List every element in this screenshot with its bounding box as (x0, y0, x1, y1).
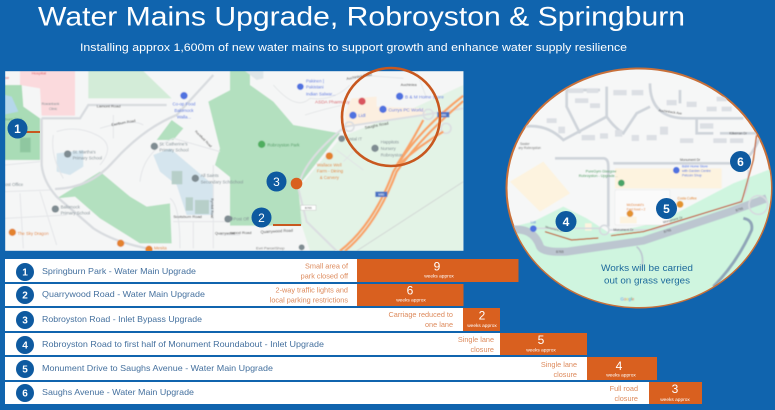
panel: overview map: Currys PC World (388, 107, 424, 112)
panel: detail circle map: Monument Dr (613, 228, 634, 232)
marker 3: 3 (273, 175, 280, 189)
row 5: Monument Drive to Saughs Avenue: Monument Drive to Saughs Avenue - Water Main Upgrade (42, 363, 273, 373)
panel: overview map: Robroyston (381, 152, 403, 157)
panel: overview map: Quarrywood Road (260, 228, 293, 234)
panel: overview map (5, 70, 464, 253)
marker 4 (556, 211, 576, 232)
works line: site 2 (273, 224, 301, 226)
row 2: Quarrywood Road: 6 (407, 284, 414, 298)
row 2: Quarrywood Road (5, 284, 464, 306)
row 6: Saughs Avenue: closure (614, 394, 638, 403)
row 1: Springburn Park: Small area of (305, 262, 349, 270)
row 4: Monument Roundabout inlet (5, 333, 587, 355)
panel: overview map: Balornock (61, 204, 81, 209)
panel: detail circle map: B&M Home Store (682, 165, 708, 169)
panel: detail circle map: Monument Dr (680, 158, 701, 162)
panel: overview map: Co-op Food (173, 102, 196, 107)
row 6: Saughs Avenue: 3 (672, 382, 679, 396)
row 4: Monument Roundabout inlet: Single lane (458, 335, 494, 344)
marker 5: 5 (663, 202, 670, 216)
row 1: Springburn Park: park closed off (301, 272, 349, 280)
row 1: Springburn Park: weeks approx (424, 274, 454, 280)
panel: overview map: se (5, 75, 10, 80)
panel: overview map: & Carvery (320, 175, 340, 180)
panel: detail circle map: with Garden Centre (682, 169, 711, 173)
panel: detail circle map: Fast food • 2 (627, 207, 646, 211)
panel: overview map: ASDA Pharmacy (315, 99, 350, 104)
panel: detail circle map: Lidl (531, 220, 536, 224)
panel: overview map: Wallace Well (317, 162, 342, 167)
marker 1: 1 (14, 122, 21, 136)
panel: overview map: Eastburn Road (111, 119, 136, 127)
panel: overview map: Auchinlea Road (346, 73, 372, 81)
panel: overview map: Robroyston Park (267, 143, 300, 148)
panel: overview map: School (230, 179, 243, 184)
row 3: Robroyston Road inlet bypass: 2 (479, 308, 486, 322)
panel: overview map: Walla... (177, 114, 191, 119)
panel: detail circle map: PureGym Glasgow (586, 170, 617, 174)
row 3: Robroyston Road inlet bypass: Robroyston Road - Inlet Bypass Upgrade (42, 314, 202, 324)
panel: overview map: St. Catherine's (159, 142, 188, 147)
panel: overview map: Scotsburn Road (173, 214, 202, 219)
row 4: Monument Roundabout inlet: 4 (22, 340, 28, 352)
map note: grass verges: Works will be carried (601, 263, 693, 273)
row 5: Monument Drive to Saughs Avenue: weeks approx (606, 372, 636, 378)
row 5: Monument Drive to Saughs Avenue: 5 (22, 364, 28, 376)
row 6: Saughs Avenue: Saughs Avenue - Water Main Upgrade (42, 387, 194, 397)
panel: overview map: Evri ParcelShop (256, 245, 285, 250)
panel: overview map: Primary School (73, 156, 102, 161)
row 6: Saughs Avenue: Full road (610, 384, 638, 393)
panel: overview map: Primary School (61, 210, 90, 215)
panel: detail circle map: Monument Dr (545, 225, 563, 233)
panel: overview map: Auchinlea (401, 83, 418, 87)
panel: overview map: Post Off (233, 217, 250, 222)
panel: overview map: Pakinen | (306, 79, 324, 84)
panel: overview map: B & M Home Store (405, 94, 444, 99)
panel: overview map: The Sky Dragon (17, 231, 49, 236)
panel: overview map: M80 (378, 193, 385, 197)
row 3: Robroyston Road inlet bypass: 3 (22, 316, 28, 326)
panel: overview map: Saughs Road (364, 120, 389, 130)
panel: overview map: Happitots (381, 140, 399, 145)
panel: overview map: All Saints (201, 173, 219, 178)
panel: overview map: Lidl (358, 113, 366, 118)
row 2: Quarrywood Road: 2 (22, 290, 28, 302)
panel: detail circle map: Sealer (520, 142, 531, 146)
row 5: Monument Drive to Saughs Avenue: 4 (616, 359, 623, 373)
map highlight ring (342, 68, 440, 166)
row 2: Quarrywood Road: 2-way traffic lights and (276, 286, 348, 294)
row 1: Springburn Park (5, 259, 518, 282)
panel: overview map: Clinic (49, 107, 57, 111)
map note: grass verges (601, 263, 693, 286)
map note: grass verges: out on grass verges (604, 276, 691, 286)
panel: overview map: burn Park (5, 117, 22, 122)
panel: detail circle map: Costa Coffee (677, 197, 697, 201)
panel: detail circle map: B765 (556, 250, 564, 254)
row 3: Robroyston Road inlet bypass (5, 308, 500, 331)
marker 6: 6 (737, 155, 744, 169)
panel: overview map: ost Office (5, 182, 24, 187)
panel: detail circle map: Monument Dr (663, 215, 684, 224)
panel: overview map: Primary School (159, 148, 189, 153)
row 5: Monument Drive to Saughs Avenue: closure (553, 370, 577, 379)
panel: overview map: Mesita (154, 245, 167, 250)
title: Water Mains Upgrade, Robroyston & Springburn (38, 2, 685, 32)
marker 2 (252, 208, 272, 228)
row 1: Springburn Park: 9 (434, 260, 441, 274)
row 3: Robroyston Road inlet bypass: weeks approx (467, 323, 497, 329)
panel: detail circle map: McDonald's (627, 203, 644, 207)
panel: overview map: rystal IT (347, 137, 362, 142)
panel: detail circle map: ary Robroyston (518, 146, 541, 150)
panel: detail circle map: Robroyston - Upgrade... (579, 174, 618, 178)
row 2: Quarrywood Road: Quarrywood Road - Water Main Upgrade (42, 289, 205, 299)
panel: detail circle map: Petcoin Shop (682, 173, 702, 177)
row 4: Monument Roundabout inlet: 5 (538, 333, 545, 347)
panel: overview map: M80 (440, 113, 447, 117)
panel: overview map: rwood Road (230, 230, 251, 235)
site 3 dot (291, 178, 302, 189)
row 2: Quarrywood Road: weeks approx (396, 298, 426, 304)
row 3: Robroyston Road inlet bypass: one lane (425, 320, 453, 329)
row 6: Saughs Avenue (5, 382, 702, 404)
marker 6 (730, 151, 751, 172)
works line: site 1 (26, 131, 40, 133)
subtitle: Installing approx 1,600m of new water mains to support growth and enhance water supply resilience (80, 42, 627, 54)
row 4: Monument Roundabout inlet: weeks approx (526, 348, 556, 354)
panel: overview map: Balornock (174, 108, 194, 113)
panel: overview map: Secondary Sch (201, 180, 231, 185)
row 4: Monument Roundabout inlet: closure (470, 345, 494, 354)
panel: overview map: Pakistani (306, 85, 324, 90)
panel: overview map: Indian Salwar... (306, 91, 336, 96)
marker 2: 2 (258, 211, 265, 225)
row 5: Monument Drive to Saughs Avenue: Single lane (541, 360, 577, 369)
marker 3 (266, 172, 286, 192)
panel: overview map: Rowanbank (42, 102, 60, 106)
panel: overview map: Hospital (32, 70, 46, 75)
panel: overview map: Nursery (381, 146, 397, 151)
row 5: Monument Drive to Saughs Avenue (5, 357, 657, 380)
marker 5 (656, 198, 677, 219)
marker 4: 4 (563, 215, 570, 229)
panel: detail circle map: Google (620, 297, 635, 302)
row 6: Saughs Avenue: 6 (22, 388, 28, 400)
panel: overview map: Quarrywood (215, 231, 235, 235)
row 1: Springburn Park: 1 (22, 268, 28, 278)
row 2: Quarrywood Road: local parking restrictions (270, 296, 348, 304)
panel: overview map: Farm - Dining (317, 169, 344, 174)
marker 1 (8, 118, 28, 138)
panel: overview map: St. Martha's (73, 150, 96, 155)
panel: detail circle map: Auchinbeck Ave (658, 108, 682, 116)
row 3: Robroyston Road inlet bypass: Carriage reduced to (388, 310, 453, 319)
panel: detail circle map: B765 (735, 206, 744, 213)
panel: detail circle map: Kilkerran Dr (729, 132, 748, 136)
panel: overview map: Lamont Road (97, 103, 121, 108)
panel: overview map: Rymfell Road (210, 198, 214, 218)
row 6: Saughs Avenue: weeks approx (660, 397, 690, 403)
panel: overview map: Rockfield Road (194, 130, 213, 148)
row 1: Springburn Park: Springburn Park - Water Main Upgrade (42, 266, 196, 276)
panel: detail circle map (500, 68, 775, 313)
row 4: Monument Roundabout inlet: Robroyston Road to first half of Monument Roundabout - Inlet Upgrade (42, 339, 324, 349)
panel: detail circle map: B765 (663, 228, 672, 234)
panel: overview map: B765 (305, 206, 312, 210)
